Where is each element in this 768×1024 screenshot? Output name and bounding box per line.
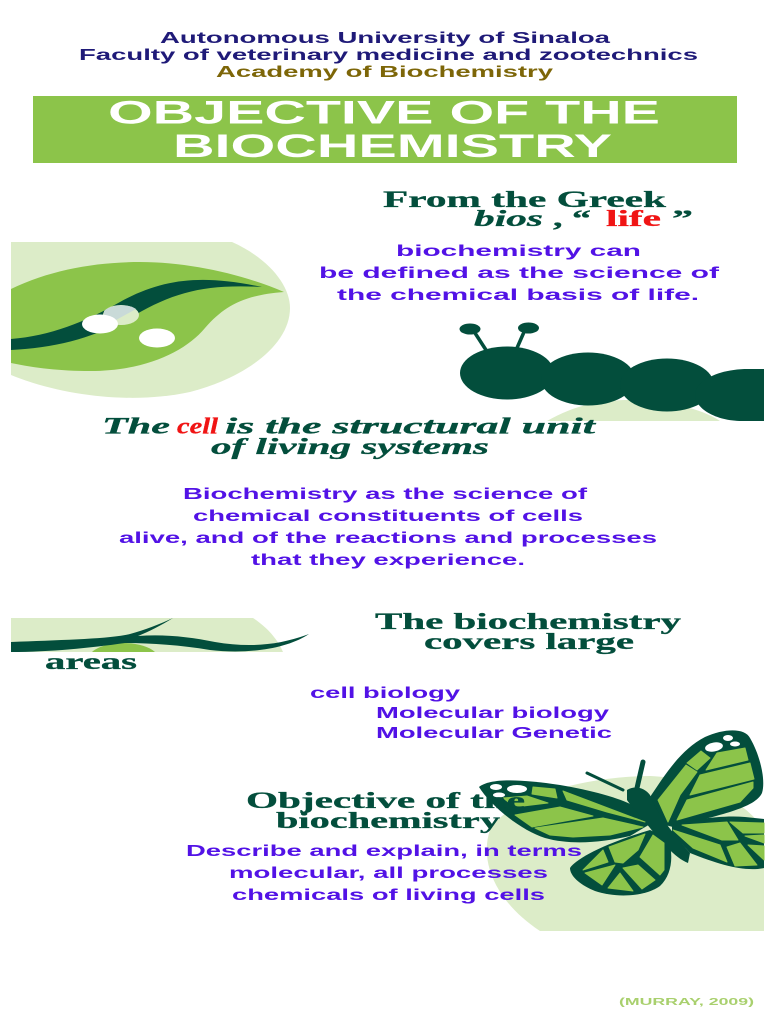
heading: from the Greek: bios — [474, 206, 543, 231]
icon: butterfly — [479, 730, 764, 931]
heading: the cell: is the structural unit — [225, 414, 596, 438]
text: chemical constituents of cells: chemical constituents of cells — [193, 508, 583, 525]
heading: the cell: cell — [177, 414, 219, 438]
heading: from the Greek: From the Greek — [383, 187, 666, 212]
text: objective description: Describe and explain, in terms — [186, 843, 582, 860]
heading: objective of the biochemistry: biochemistry — [276, 808, 501, 833]
text: objective description — [186, 843, 582, 904]
title banner — [33, 94, 737, 164]
text: definition of biochemistry: the chemical basis of life. — [337, 287, 699, 304]
heading: from the Greek: life — [606, 206, 661, 231]
heading: the cell: The — [102, 414, 170, 438]
text: definition of biochemistry — [319, 243, 720, 304]
header: institution lines: Autonomous University of Sinaloa — [160, 30, 610, 47]
heading: areas covered: covers large — [424, 629, 634, 654]
title banner: BIOCHEMISTRY — [173, 128, 613, 164]
text: chemical constituents of cells: alive, and of the reactions and processes — [119, 530, 657, 547]
list: areas of biochemistry: cell biology — [310, 685, 460, 702]
list: areas of biochemistry — [310, 685, 612, 742]
heading: areas covered — [45, 609, 682, 674]
heading: from the Greek: ” — [672, 206, 693, 231]
heading: the cell: of living systems — [211, 434, 489, 459]
heading: objective of the biochemistry — [246, 788, 525, 833]
icon: caterpillar — [460, 322, 764, 421]
header: institution lines — [79, 30, 698, 81]
heading: the cell — [102, 414, 596, 459]
header: institution lines: Academy of Biochemistry — [216, 64, 553, 81]
heading: areas covered: areas — [45, 649, 137, 674]
icon: branch — [11, 618, 309, 652]
list: areas of biochemistry: Molecular biology — [376, 705, 609, 722]
heading: from the Greek: , “ — [553, 206, 591, 231]
text: chemical constituents of cells — [119, 486, 657, 569]
heading: areas covered: The biochemistry — [375, 609, 682, 634]
header: institution lines: Faculty of veterinary medicine and zootechnics — [79, 47, 698, 64]
text: objective description: chemicals of living cells — [232, 887, 545, 904]
text: definition of biochemistry: be defined as the science of — [319, 265, 720, 282]
text: objective description: molecular, all processes — [229, 865, 548, 882]
title banner: OBJECTIVE OF THE — [108, 94, 660, 130]
text: chemical constituents of cells: that they experience. — [251, 552, 525, 569]
icon: leaf with water drops — [11, 242, 290, 398]
heading: from the Greek — [383, 187, 693, 231]
list: areas of biochemistry: Molecular Genetic — [376, 725, 612, 742]
citation: (MURRAY, 2009) — [619, 996, 754, 1008]
text: chemical constituents of cells: Biochemistry as the science of — [183, 486, 588, 503]
heading: objective of the biochemistry: Objective of the — [246, 788, 525, 813]
text: definition of biochemistry: biochemistry can — [396, 243, 641, 260]
